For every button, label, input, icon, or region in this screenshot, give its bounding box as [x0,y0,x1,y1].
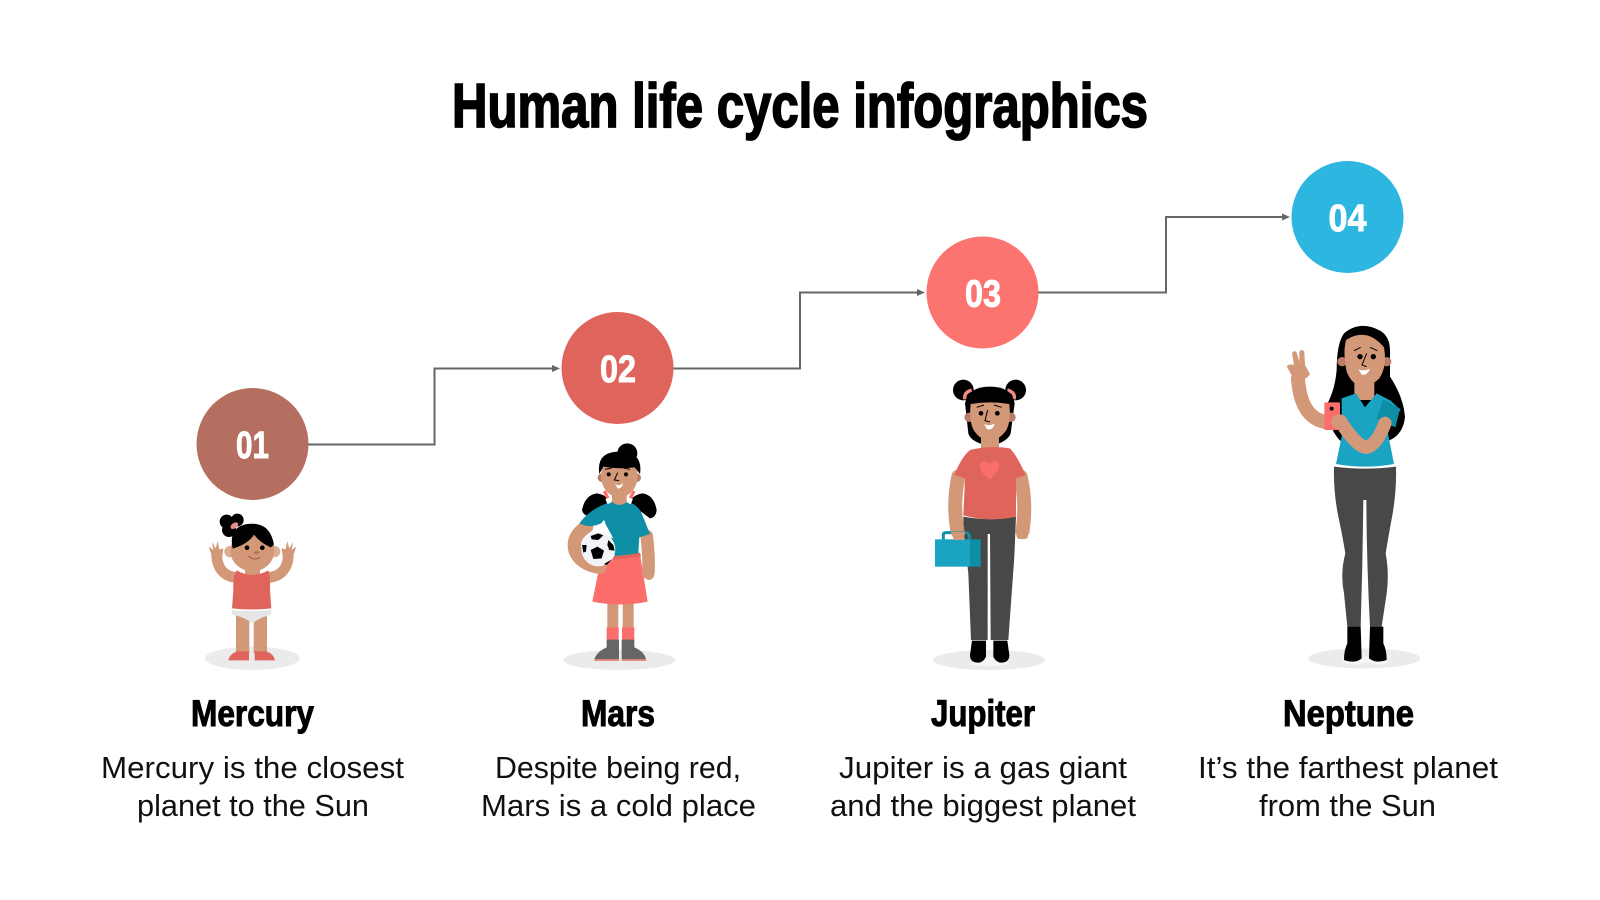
arrow: step 3 to 4 [1038,214,1290,292]
text block: Mars: Mars [581,693,655,734]
number badge 04: 04 [1328,198,1366,240]
text block: Neptune [1198,693,1498,823]
arrow: step 1 to 2 [308,365,560,444]
text block: Neptune: Neptune [1283,693,1414,734]
number badge 03 [926,236,1038,348]
title: Human life cycle infographics [452,72,1148,141]
text block: Mars: Mars is a cold place [481,788,756,823]
arrow: step 2 to 3 [673,289,925,368]
number badge 03: 03 [965,274,1001,316]
text block: Mercury: Mercury [191,693,314,734]
number badge 02: 02 [600,349,636,391]
text block: Jupiter: and the biggest planet [830,788,1136,823]
figure: adult woman taking selfie [1287,326,1420,668]
figure: child with soccer ball [563,443,675,670]
figure: teen with lunch box [933,380,1045,670]
number badge 01 [196,388,308,500]
number badge 04 [1292,161,1404,273]
text block: Mars [481,693,756,823]
text block: Jupiter: Jupiter [931,693,1035,734]
text block: Mercury: planet to the Sun [137,788,369,823]
text block: Mercury: Mercury is the closest [101,750,404,785]
number badge 01: 01 [236,425,269,467]
text block: Jupiter [830,693,1136,823]
number badge 02 [562,312,674,424]
text block: Neptune: It’s the farthest planet [1198,750,1498,785]
figure: baby [205,514,300,670]
text block: Mars: Despite being red, [495,750,741,785]
text block: Neptune: from the Sun [1259,788,1436,823]
text block: Mercury [101,693,404,823]
text block: Jupiter: Jupiter is a gas giant [839,750,1127,785]
